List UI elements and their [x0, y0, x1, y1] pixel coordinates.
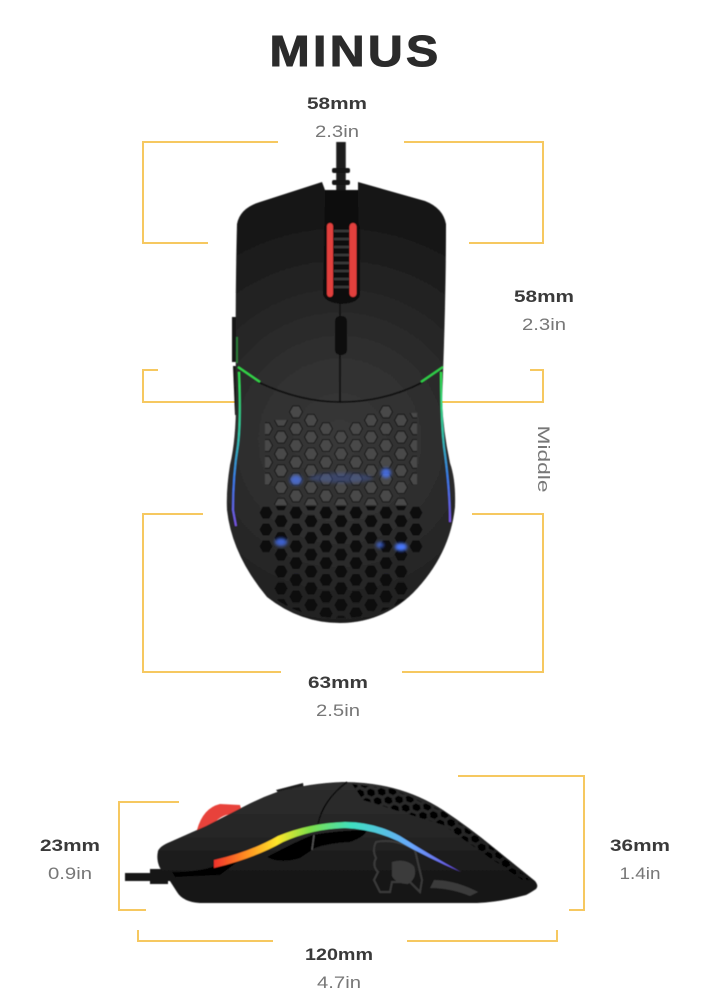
- middle label: Middle: [534, 426, 553, 492]
- top width label: 58mm: [307, 94, 367, 113]
- left rgb strip: [238, 367, 260, 382]
- side height right bracket: [458, 776, 584, 910]
- rear width label: 63mm: [308, 673, 368, 692]
- scroll wheel side: [197, 804, 242, 834]
- rainbow strip: [214, 822, 461, 872]
- grip width label: 2.3in: [522, 315, 566, 334]
- rear width bracket: [143, 514, 543, 672]
- length label: 120mm: [305, 945, 373, 964]
- side grip recess: [267, 830, 367, 861]
- top width label: [307, 94, 367, 141]
- mouse body: [227, 182, 455, 623]
- length bracket: [138, 930, 557, 941]
- side right label: 36mm: [610, 836, 670, 855]
- side left label: [40, 836, 100, 883]
- side view mouse: [125, 780, 537, 903]
- grip width label: 58mm: [514, 287, 574, 306]
- grip width label: [514, 287, 574, 334]
- button seam: [258, 382, 423, 402]
- button seam: [318, 782, 347, 824]
- right rgb strip: [421, 367, 443, 382]
- rear width label: 2.5in: [316, 701, 360, 720]
- glorious logo: [374, 841, 478, 896]
- side left label: 0.9in: [48, 864, 92, 883]
- top side button: [276, 783, 304, 797]
- side cable: [125, 869, 172, 884]
- middle bracket: [143, 370, 543, 402]
- scroll channel: [323, 190, 360, 304]
- hex mesh, lower dark: [260, 506, 422, 618]
- top view mouse: [227, 142, 455, 625]
- rear width label: [308, 673, 368, 720]
- front button shadow: [172, 860, 240, 877]
- side honeycomb: [352, 784, 530, 880]
- hex mesh, upper see-through: [264, 406, 418, 506]
- dpi button: [335, 316, 347, 355]
- scroll wheel: [324, 218, 360, 302]
- length label: 4.7in: [317, 973, 361, 992]
- front width bracket: [143, 142, 543, 243]
- side height left bracket: [119, 802, 179, 910]
- top width label: 2.3in: [315, 122, 359, 141]
- side right label: [610, 836, 670, 883]
- side buttons: [232, 317, 238, 415]
- title: MINUS: [270, 27, 442, 76]
- cable: [332, 142, 350, 190]
- grip seam: [312, 835, 314, 850]
- center seam: [339, 303, 341, 402]
- side right label: 1.4in: [620, 864, 660, 883]
- side left label: 23mm: [40, 836, 100, 855]
- side body: [157, 782, 537, 903]
- blue glow: [275, 468, 407, 551]
- length label: [305, 945, 373, 992]
